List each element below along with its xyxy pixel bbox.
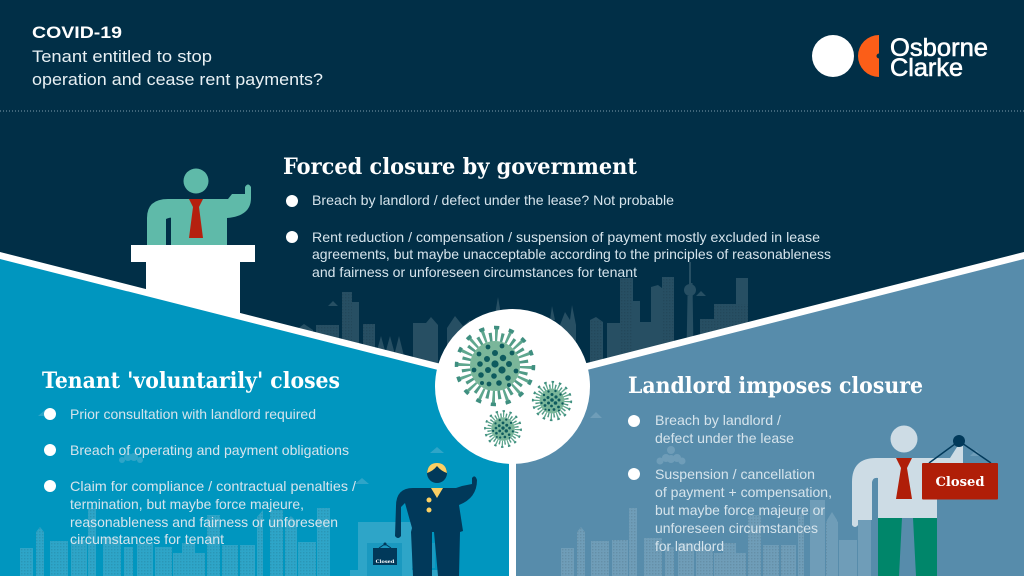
centre circle with virus [435, 309, 590, 464]
text: tenant closes [42, 368, 356, 547]
bullet text: circumstances for tenant [70, 531, 224, 547]
heading: Forced closure by government [283, 154, 638, 180]
skyline right [561, 508, 871, 576]
tenant head [427, 463, 447, 483]
logo: Osborne Clarke [812, 34, 988, 82]
title block: Tenant entitled to stop [32, 47, 212, 66]
podium [131, 245, 255, 330]
bullet text [312, 192, 831, 280]
bullet text: and fairness or unforeseen circumstances for tenant [312, 264, 637, 280]
closed sign: Closed [936, 475, 984, 490]
white dividers [0, 252, 1024, 576]
bullet text [70, 406, 356, 547]
tenant hair [427, 463, 447, 473]
tenant figure [373, 463, 477, 576]
virus large [456, 328, 534, 404]
background shop [350, 522, 440, 576]
bullet text: Claim for compliance / contractual penalties / [70, 478, 356, 494]
landlord head [890, 426, 918, 452]
tenant collar and buttons [426, 488, 443, 512]
logo: Osborne Clarke: Clarke [890, 54, 963, 82]
landlord legs [878, 518, 937, 576]
podium figure [131, 168, 255, 330]
text: landlord closure [628, 373, 923, 554]
bullet text [655, 412, 832, 554]
red tie [189, 199, 203, 238]
landlord tie [896, 458, 912, 499]
bullet text: Rent reduction / compensation / suspension of payment mostly excluded in lease [312, 229, 820, 245]
bullets [44, 408, 56, 492]
bullet text: Suspension / cancellation [655, 466, 815, 482]
bullet text: termination, but maybe force majeure, [70, 496, 304, 512]
panel: landlord imposes closure [516, 259, 1024, 576]
virus medium [533, 382, 571, 420]
bullet text: defect under the lease [655, 430, 794, 446]
figure body [147, 184, 251, 245]
closed sign [922, 435, 998, 500]
title block: COVID-19 [32, 23, 122, 42]
right skyline extra towers [810, 500, 870, 576]
bullet text: of payment + compensation, [655, 484, 832, 500]
bullet text: Breach by landlord / [655, 412, 781, 428]
landlord body [852, 446, 963, 527]
bullets [286, 195, 298, 243]
small closed sign: Closed [376, 559, 395, 565]
heading: Landlord imposes closure [628, 373, 923, 399]
landlord figure [852, 426, 998, 576]
top skyline [296, 262, 748, 390]
bullet text: agreements, but maybe unacceptable according to the principles of reasonableness [312, 246, 831, 262]
bullet text: reasonableness and fairness or unforeseen [70, 514, 338, 530]
bullet text: but maybe force majeure or [655, 502, 825, 518]
bullets [628, 415, 640, 480]
bullet text: Breach by landlord / defect under the lease? Not probable [312, 192, 674, 208]
clouds right [590, 412, 982, 464]
title block [32, 23, 323, 89]
bullet text: for landlord [655, 538, 724, 554]
title block: operation and cease rent payments? [32, 70, 323, 89]
skyline left [20, 508, 330, 576]
logo: Osborne Clarke: Osborne [890, 34, 988, 62]
text: forced closure [283, 154, 831, 280]
bullet text: Breach of operating and payment obligations [70, 442, 349, 458]
figure head [184, 168, 208, 194]
tenant body [395, 476, 477, 576]
bullet text: Prior consultation with landlord required [70, 406, 316, 422]
panel: tenant voluntarily closes [0, 259, 509, 576]
heading: Tenant 'voluntarily' closes [42, 368, 340, 394]
clouds left [38, 410, 444, 484]
virus small [485, 411, 521, 447]
bullet text: unforeseen circumstances [655, 520, 818, 536]
